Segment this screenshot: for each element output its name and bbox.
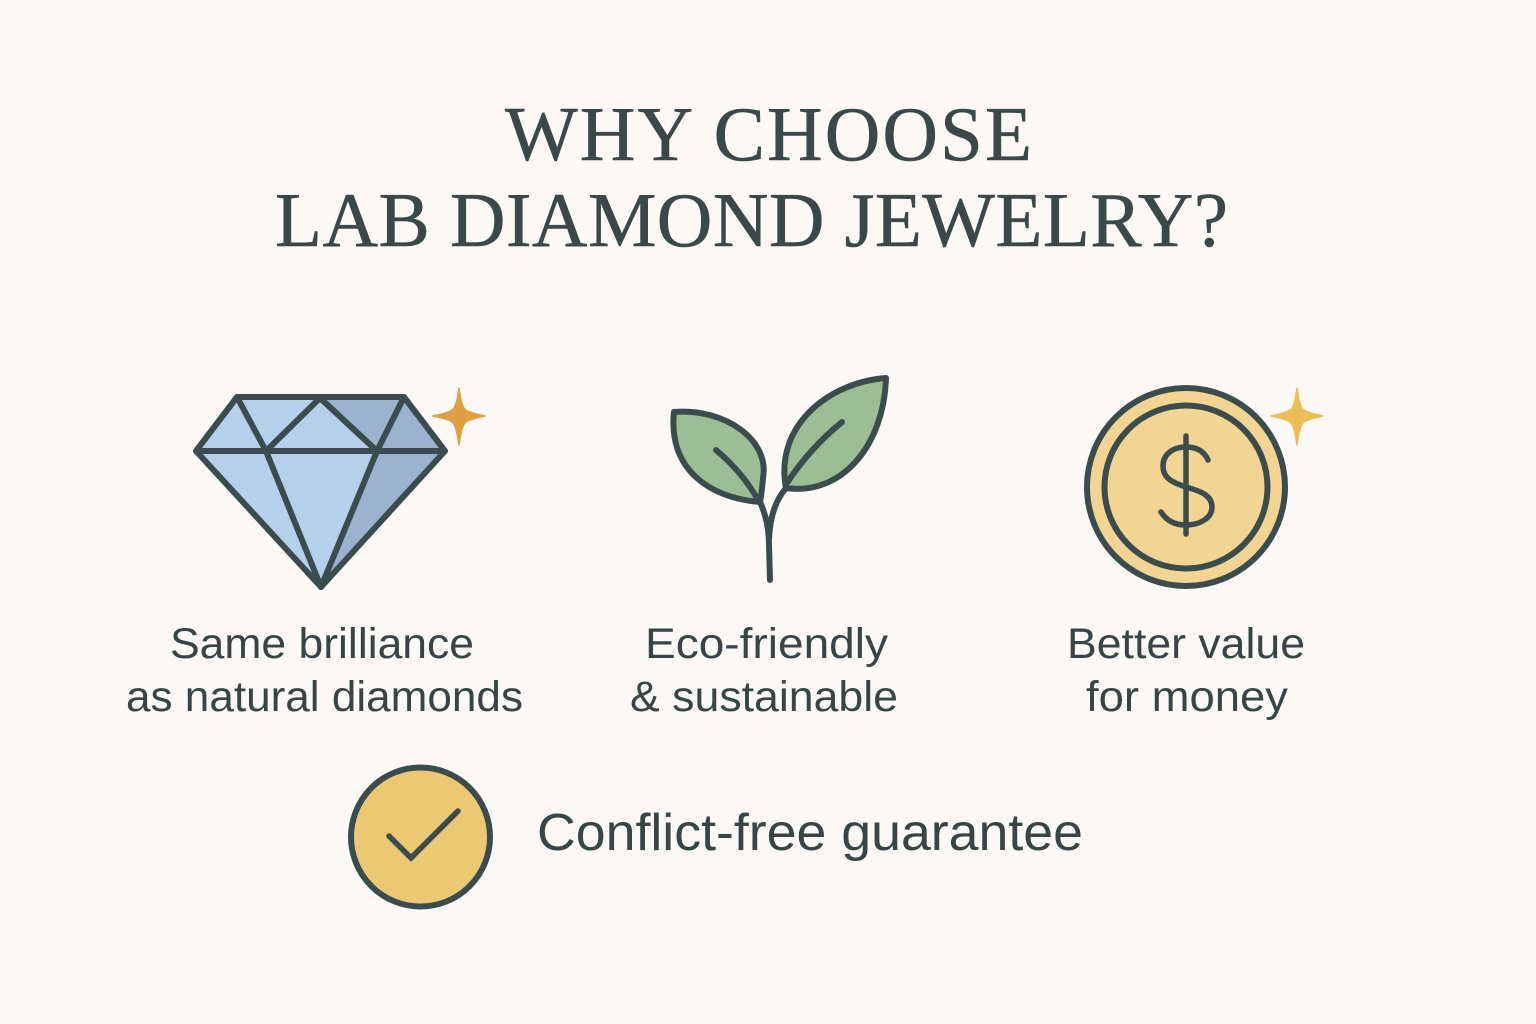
label: eco-friendly xyxy=(630,620,898,721)
label: eco-friendly: Eco-friendly xyxy=(645,620,889,668)
label: better value xyxy=(1067,620,1305,721)
label: eco-friendly: & sustainable xyxy=(630,673,898,721)
icon: coin sparkle xyxy=(1271,388,1323,445)
icon: sprout xyxy=(673,378,886,580)
label: conflict-free guarantee: Conflict-free guarantee xyxy=(537,804,1083,862)
icon: diamond xyxy=(196,397,445,587)
label: same brilliance xyxy=(126,620,523,721)
label: same brilliance: as natural diamonds xyxy=(126,673,523,721)
icon: coin xyxy=(1087,388,1285,586)
panel: conflict-free guarantee xyxy=(351,768,1083,906)
title: WHY CHOOSE xyxy=(505,91,1032,177)
panel: same brilliance xyxy=(126,388,523,721)
label: better value: for money xyxy=(1086,673,1289,721)
icon: sparkle xyxy=(433,388,485,445)
panel: eco-friendly xyxy=(630,378,898,721)
title xyxy=(275,91,1228,263)
panel: better value xyxy=(1067,388,1323,721)
label: better value: Better value xyxy=(1067,620,1305,668)
title: LAB DIAMOND JEWELRY? xyxy=(275,177,1228,263)
label: same brilliance: Same brilliance xyxy=(170,620,474,668)
icon: check badge xyxy=(351,768,490,906)
